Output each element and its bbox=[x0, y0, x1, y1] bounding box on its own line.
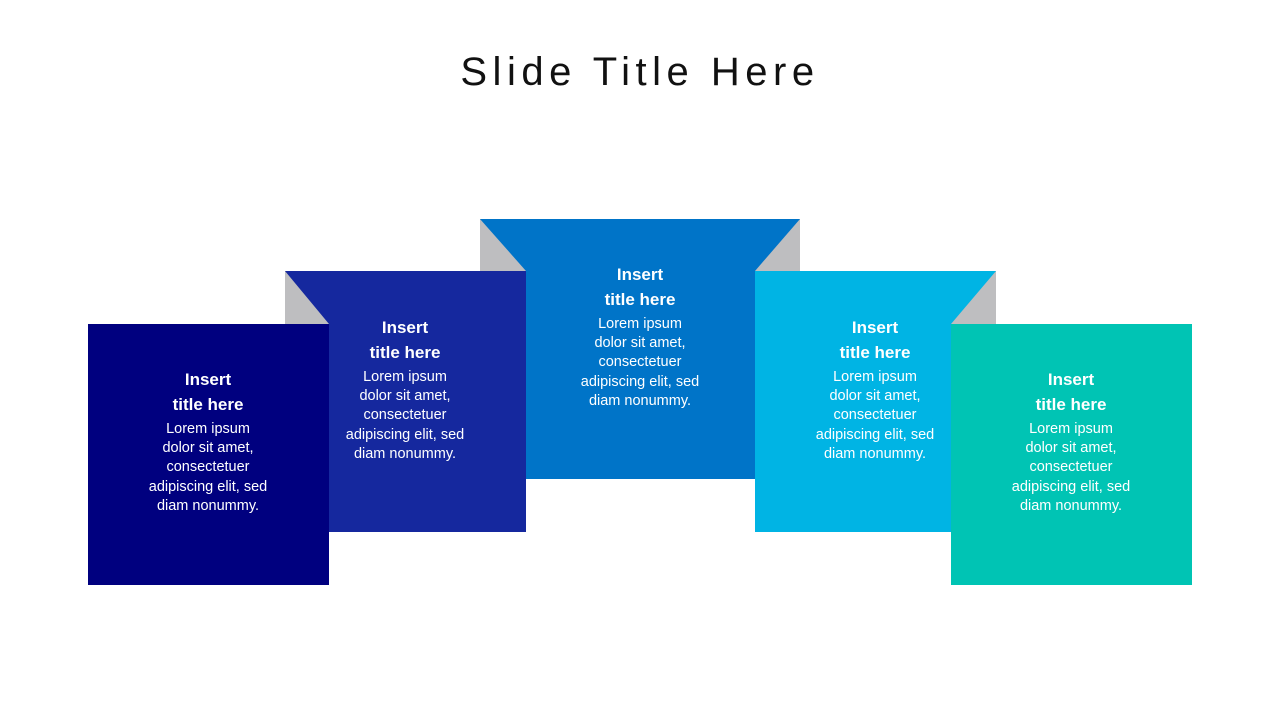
text: step 1: consectetuer bbox=[166, 459, 250, 475]
fold: step 4 bbox=[951, 271, 996, 324]
text: step 4: consectetuer bbox=[833, 407, 917, 423]
text: step 1: dolor sit amet, bbox=[162, 440, 254, 456]
text: step 3: diam nonummy. bbox=[589, 393, 691, 409]
panel: step 3 (center) bbox=[480, 219, 800, 479]
text: step 2: Lorem ipsum bbox=[363, 369, 447, 385]
text: step 4: diam nonummy. bbox=[824, 446, 926, 462]
text: step 2: consectetuer bbox=[363, 407, 447, 423]
text: step 3: Insert bbox=[617, 265, 663, 284]
text: step 2: title here bbox=[370, 343, 440, 362]
text: step 3: dolor sit amet, bbox=[594, 335, 686, 351]
text: step 1: Insert bbox=[185, 370, 231, 389]
text: step 4: title here bbox=[840, 343, 910, 362]
fold: step 3 right bbox=[755, 219, 800, 271]
text: step 4 bbox=[816, 318, 934, 462]
fold: step 2 bbox=[285, 271, 329, 324]
panel: step 2 bbox=[285, 271, 526, 532]
panel: step 5 bbox=[951, 324, 1192, 585]
text: step 3: consectetuer bbox=[598, 354, 682, 370]
text: step 5: title here bbox=[1036, 395, 1106, 414]
text: step 2: diam nonummy. bbox=[354, 446, 456, 462]
text: step 3 bbox=[581, 265, 699, 409]
panel: step 4 bbox=[755, 271, 996, 532]
title: Slide Title Here bbox=[460, 50, 820, 94]
text: step 1: diam nonummy. bbox=[157, 498, 259, 514]
text: step 5: Insert bbox=[1048, 370, 1094, 389]
text: step 5: Lorem ipsum bbox=[1029, 421, 1113, 437]
text: step 4: Insert bbox=[852, 318, 898, 337]
panel: step 1 bbox=[88, 324, 329, 585]
text: step 5: diam nonummy. bbox=[1020, 498, 1122, 514]
text: step 5: adipiscing elit, sed bbox=[1012, 479, 1130, 495]
text: step 5 bbox=[1012, 370, 1130, 514]
text: step 5: dolor sit amet, bbox=[1025, 440, 1117, 456]
text: step 4: Lorem ipsum bbox=[833, 369, 917, 385]
text: step 1: Lorem ipsum bbox=[166, 421, 250, 437]
text: step 1: adipiscing elit, sed bbox=[149, 479, 267, 495]
text: step 1 bbox=[149, 370, 267, 514]
text: step 2: adipiscing elit, sed bbox=[346, 427, 464, 443]
text: step 2: Insert bbox=[382, 318, 428, 337]
text: step 3: title here bbox=[605, 290, 675, 309]
text: step 3: Lorem ipsum bbox=[598, 316, 682, 332]
text: step 5: consectetuer bbox=[1029, 459, 1113, 475]
text: step 4: adipiscing elit, sed bbox=[816, 427, 934, 443]
text: step 3: adipiscing elit, sed bbox=[581, 374, 699, 390]
text: step 1: title here bbox=[173, 395, 243, 414]
text: step 4: dolor sit amet, bbox=[829, 388, 921, 404]
text: step 2: dolor sit amet, bbox=[359, 388, 451, 404]
fold: step 3 left bbox=[480, 219, 526, 271]
text: step 2 bbox=[346, 318, 464, 462]
